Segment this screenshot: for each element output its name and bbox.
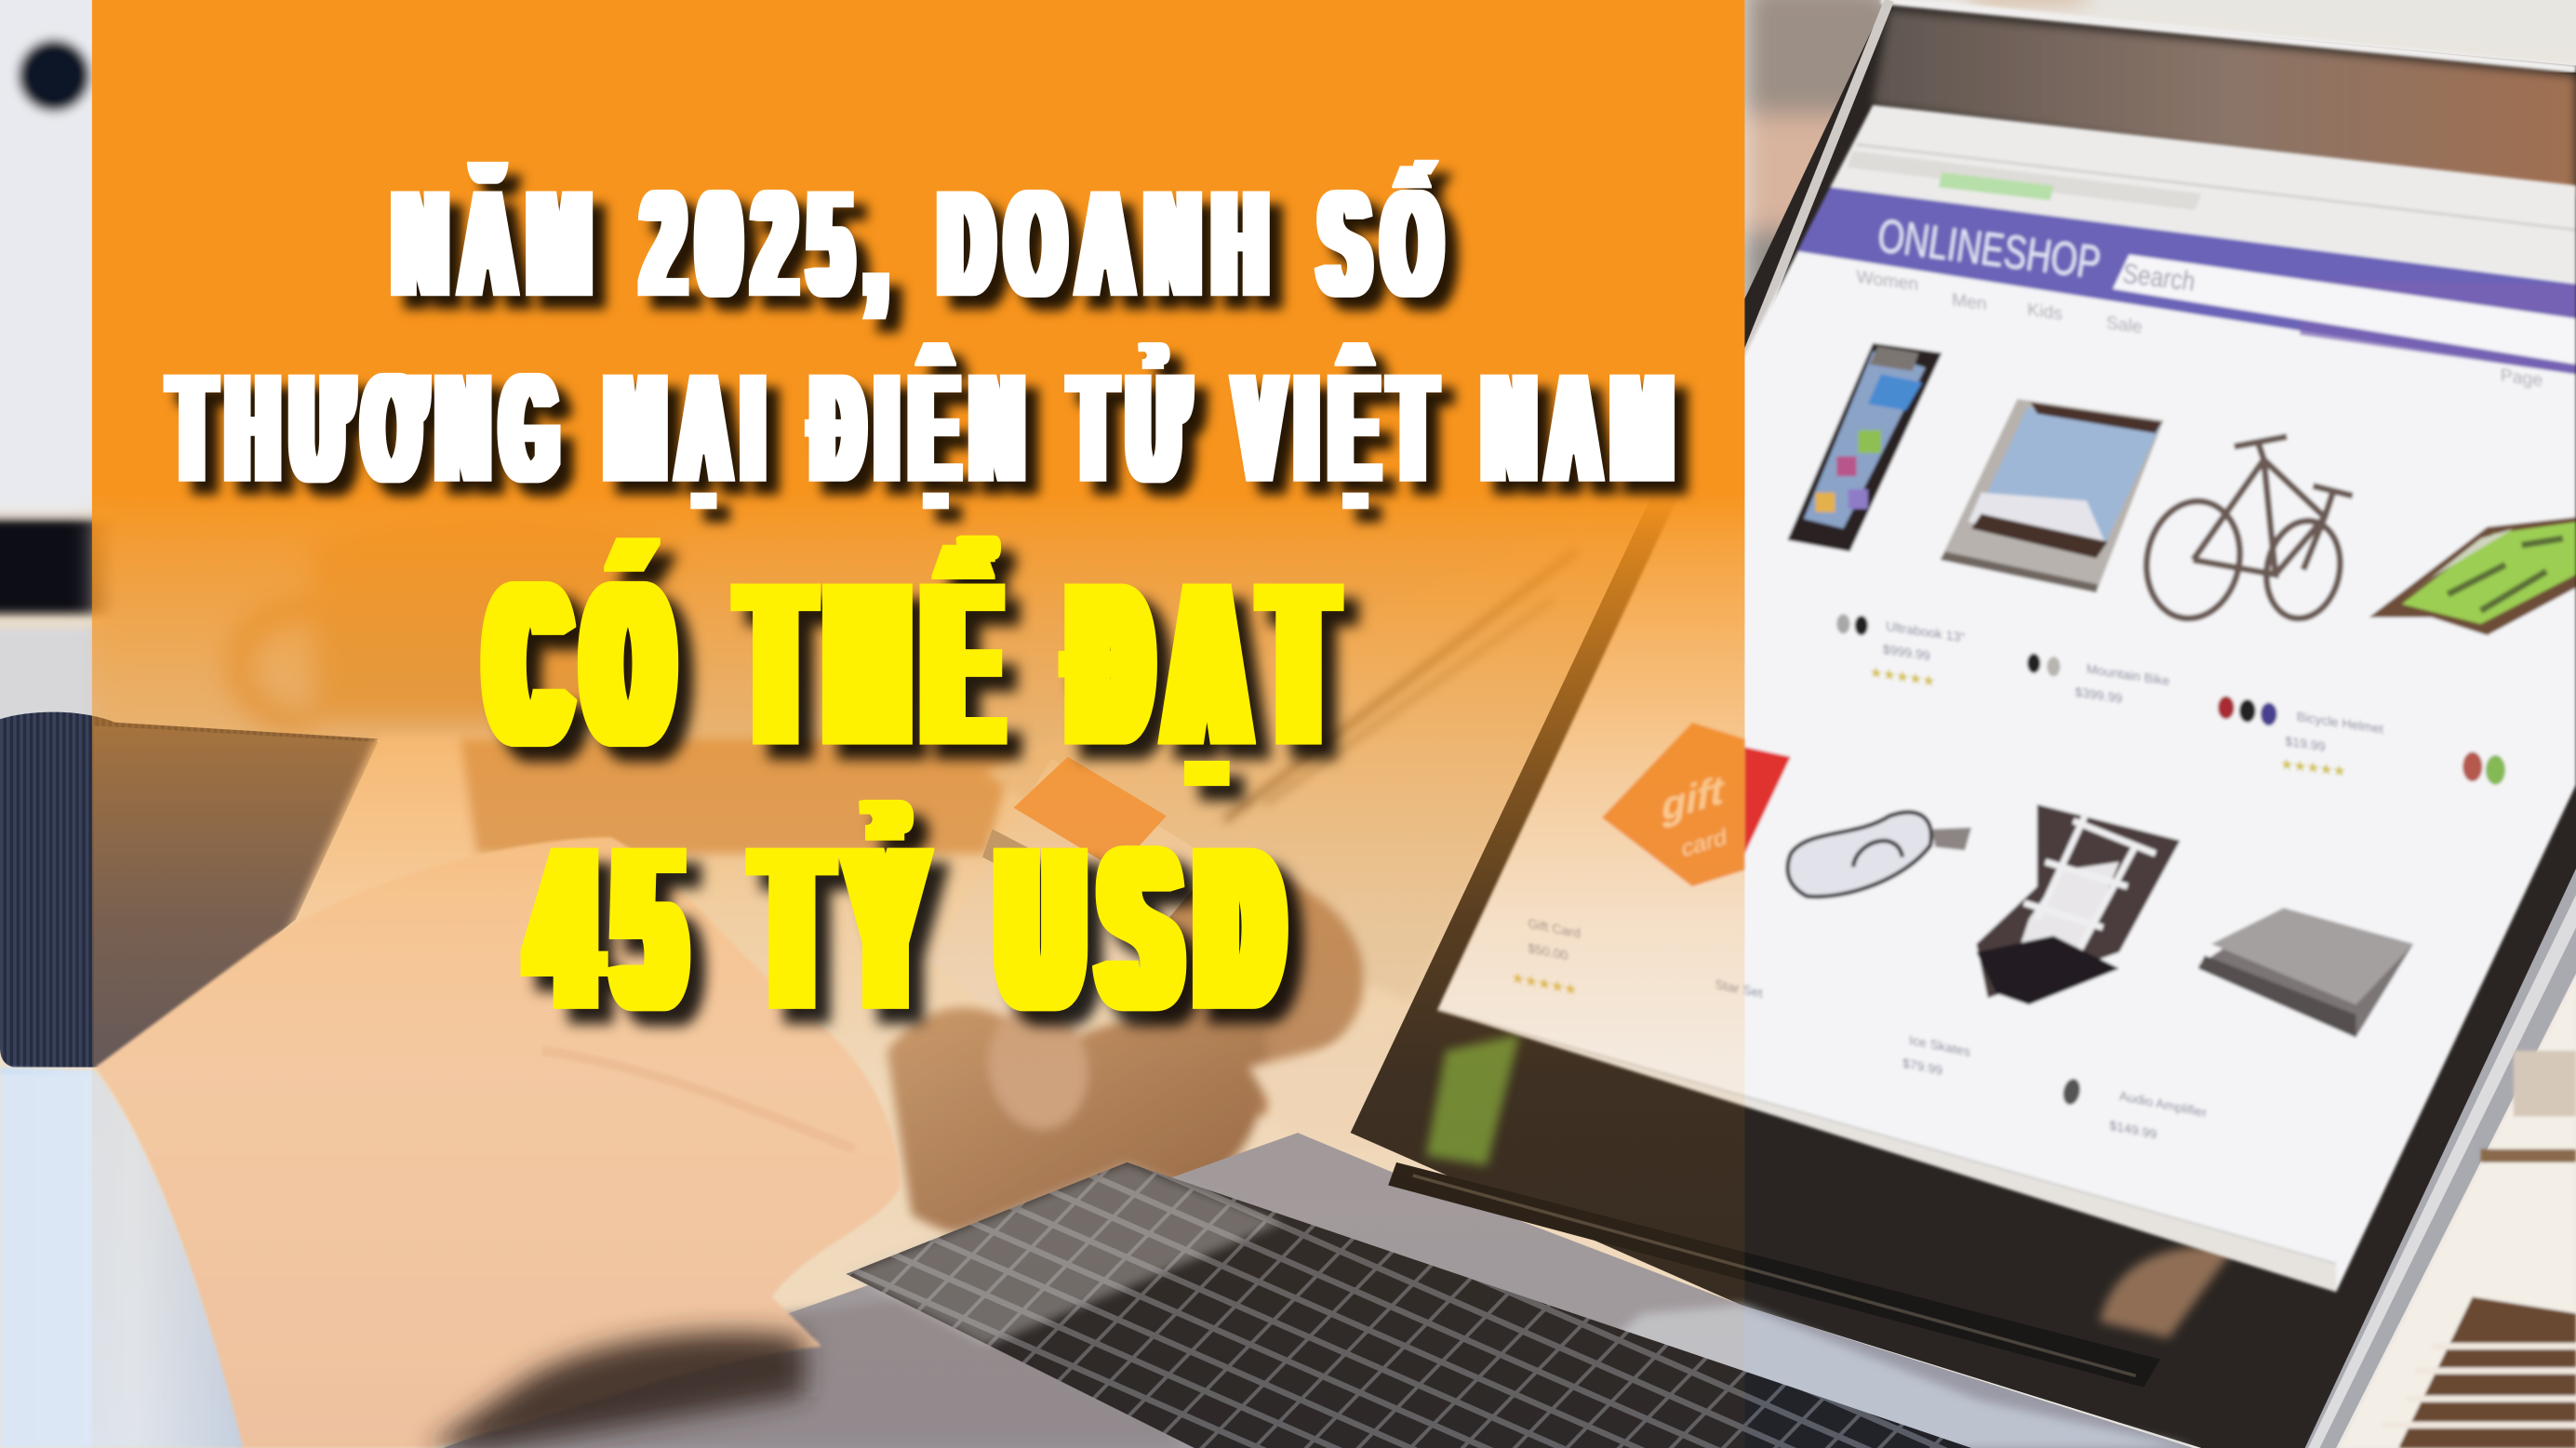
shop menu: Page — [2501, 365, 2543, 391]
dark shadow under hand — [427, 1332, 805, 1448]
product: audio amplifier — [2198, 908, 2413, 1038]
foreground hand — [95, 837, 901, 1448]
wrist and far hand — [279, 525, 1643, 1116]
product: helmet — [2369, 517, 2576, 635]
product captions and swatches: Mountain Bike — [2087, 662, 2169, 689]
holding hand fingers — [888, 997, 1267, 1242]
credit card — [930, 757, 1216, 1059]
desk strip — [1248, 1017, 1446, 1149]
product: ski goggles — [1788, 812, 1971, 897]
text: NĂM 2025, DOANH SỐ — [394, 160, 1456, 328]
hand reflection on hinge — [2100, 1246, 2235, 1338]
product: smartphone — [1787, 343, 1942, 551]
text: CÓ THỂ ĐẠT — [492, 535, 1355, 793]
product captions and swatches: ★★★★★ — [2280, 757, 2346, 780]
product captions and swatches: $50.00 — [1528, 941, 1568, 963]
product: ice skates — [1976, 804, 2180, 1004]
laptop base — [444, 1133, 2194, 1448]
search box: Search — [2123, 259, 2195, 298]
laptop screen bezel — [1351, 0, 2576, 1448]
keyboard — [846, 1162, 1971, 1448]
shop menu: Women — [1857, 267, 1918, 295]
product: bicycle — [2136, 437, 2353, 627]
product: gift card: gift — [1660, 767, 1726, 830]
shop menu — [1857, 267, 2543, 391]
shop menu: Men — [1952, 289, 1987, 314]
product captions and swatches: Audio Amplifier — [2119, 1089, 2207, 1122]
blurred backdrop behind the panel: mug and table — [99, 509, 1742, 755]
laptop silver edge — [2305, 869, 2576, 1448]
product captions and swatches: Bicycle Helmet — [2297, 710, 2383, 737]
hinge — [1388, 1162, 2160, 1388]
panel: orange overlay — [92, 0, 1744, 1448]
product captions and swatches: Star Set — [1715, 977, 1763, 1002]
jacket sleeve — [0, 712, 378, 1067]
product captions and swatches: Ice Skates — [1909, 1033, 1970, 1060]
product captions and swatches: Gift Card — [1528, 917, 1581, 942]
shop logo: ONLINESHOP — [1877, 207, 2100, 289]
product captions and swatches: $19.99 — [2285, 735, 2326, 755]
laptop screen — [1437, 105, 2576, 1292]
product: gift card: card — [1681, 824, 1728, 862]
product captions and swatches: $79.99 — [1902, 1056, 1942, 1079]
product captions and swatches: $149.99 — [2109, 1119, 2157, 1143]
product: laptop — [1941, 399, 2164, 592]
product captions and swatches: $999.99 — [1883, 643, 1930, 664]
wooden surface bottom right — [2340, 976, 2576, 1448]
product captions and swatches: ★★★★★ — [1870, 665, 1935, 690]
text: 45 TỶ USD — [535, 799, 1303, 1057]
product captions and swatches: Ultrabook 13" — [1886, 619, 1965, 646]
shirt cuff — [0, 1067, 243, 1448]
blurred backdrop top right — [1744, 0, 2576, 378]
shop menu: Kids — [2027, 299, 2062, 325]
product captions and swatches — [1512, 614, 2505, 1143]
shop header band — [1797, 187, 2576, 374]
product captions and swatches: ★★★★★ — [1512, 971, 1577, 999]
search box — [2113, 255, 2576, 365]
product captions and swatches: $399.99 — [2075, 685, 2123, 707]
shop menu: Sale — [2106, 312, 2142, 338]
blurred left wall strip — [0, 0, 115, 725]
product: gift card — [1602, 723, 1791, 886]
